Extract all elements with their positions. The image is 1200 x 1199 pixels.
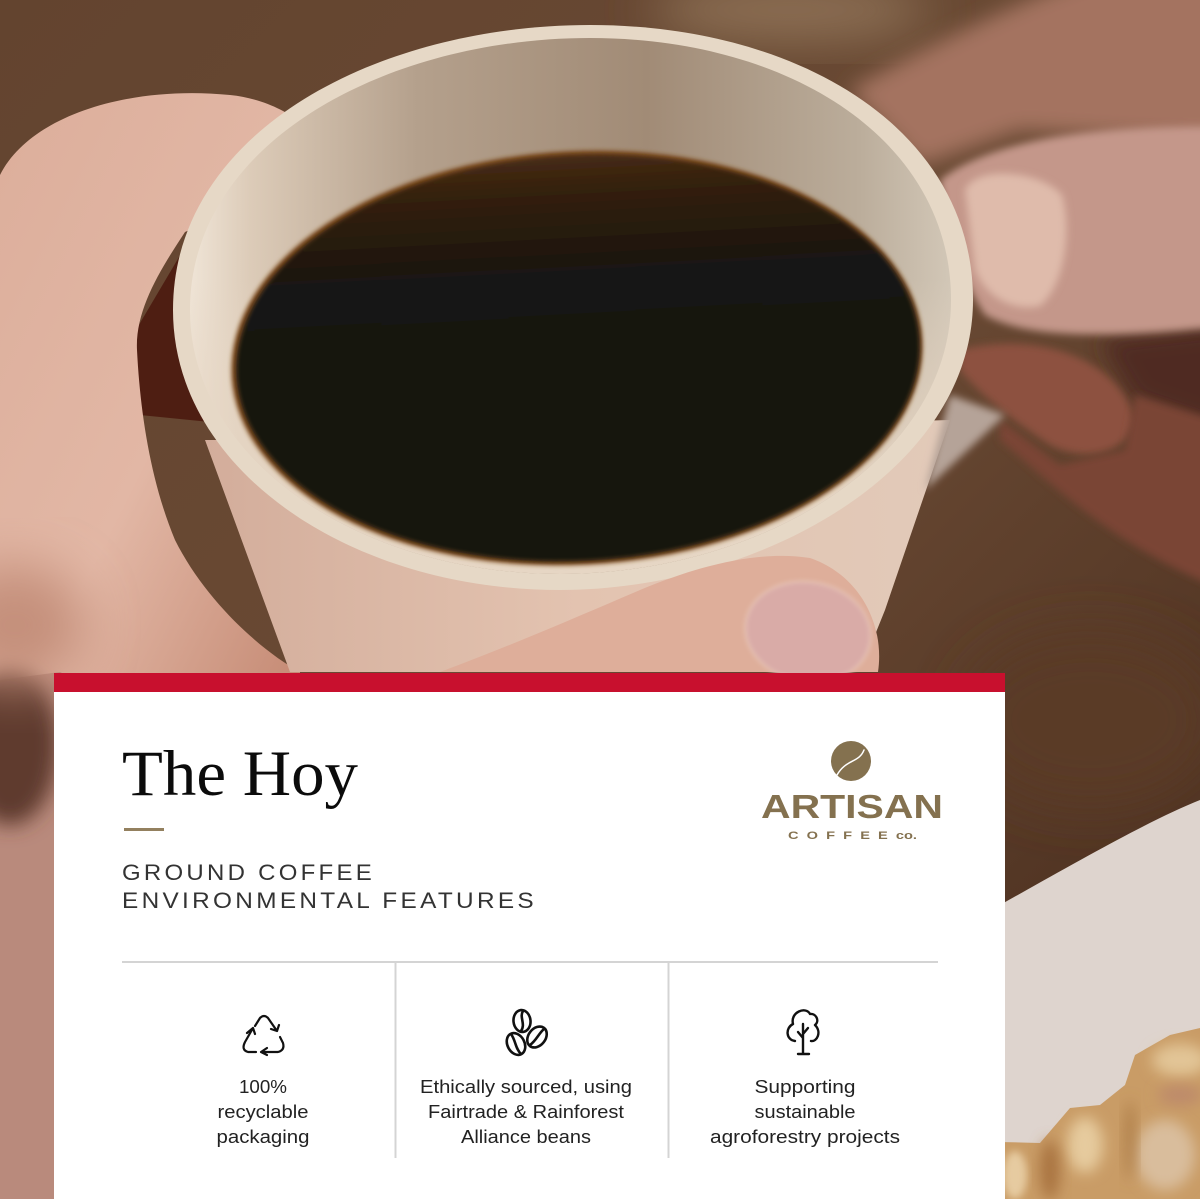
feature text: recyclable bbox=[218, 1101, 308, 1122]
icon: coffee beans bbox=[503, 1009, 551, 1058]
subtitle: ENVIRONMENTAL FEATURES bbox=[122, 888, 537, 913]
dark gap behind left hand bbox=[130, 230, 240, 425]
feature: agroforestry projects bbox=[710, 1010, 900, 1147]
cup interior bbox=[190, 38, 951, 574]
logo wordmark: ARTISAN bbox=[761, 788, 943, 825]
thumb bbox=[440, 556, 879, 672]
croissant bbox=[1000, 1028, 1200, 1199]
feature text bbox=[420, 1076, 632, 1147]
feature: recyclable packaging bbox=[216, 1016, 310, 1147]
logo tagline: C O F F E E co. bbox=[788, 830, 917, 842]
heading: The Hoy: The Hoy bbox=[122, 738, 359, 810]
feature text: Fairtrade & Rainforest bbox=[428, 1101, 624, 1122]
feature text: Supporting bbox=[754, 1076, 856, 1097]
plate bbox=[1000, 800, 1200, 1199]
feature text: Alliance beans bbox=[461, 1126, 591, 1147]
feature text: sustainable bbox=[754, 1101, 856, 1122]
feature text: Ethically sourced, using bbox=[420, 1076, 632, 1097]
right hand fingers bbox=[850, 0, 1200, 610]
icon: tree bbox=[788, 1010, 818, 1054]
logo bean mark bbox=[831, 741, 871, 781]
heading underline bbox=[124, 828, 164, 831]
logo: Artisan Coffee Co. bbox=[761, 741, 943, 842]
cup rim bbox=[173, 25, 973, 590]
panel: product information card bbox=[54, 673, 1005, 1199]
feature text bbox=[216, 1076, 310, 1147]
subtitle: GROUND COFFEE bbox=[122, 860, 375, 885]
feature text: agroforestry projects bbox=[710, 1126, 900, 1147]
coffee surface bbox=[221, 133, 933, 583]
feature: ethically sourced beans bbox=[420, 1009, 632, 1147]
icon: recycle bbox=[244, 1016, 283, 1055]
divider lines bbox=[122, 962, 938, 1158]
feature text: packaging bbox=[216, 1126, 310, 1147]
cup body bbox=[205, 420, 950, 672]
feature text: 100% bbox=[239, 1076, 287, 1097]
left hand bbox=[0, 93, 300, 690]
subtitle bbox=[122, 860, 537, 913]
red top bar bbox=[54, 673, 1005, 692]
feature text bbox=[710, 1076, 900, 1147]
